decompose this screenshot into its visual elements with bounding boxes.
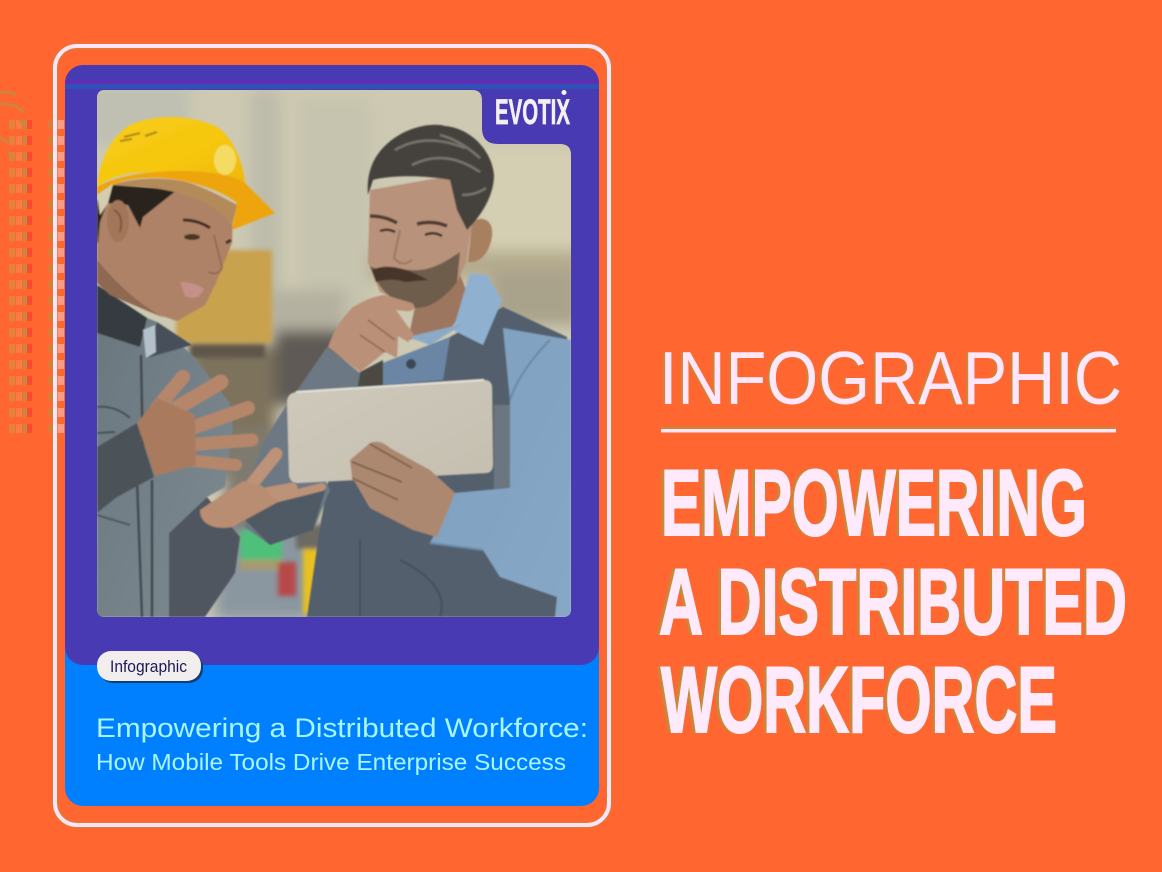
left man: helmet [97,117,245,187]
photo: two workers with a tablet [90,85,580,620]
panel: card [65,65,599,806]
right man: beard [370,252,460,308]
right man: neck [408,275,470,340]
right man: face [368,176,472,308]
divider line [661,427,1116,432]
left man: raised hand [157,377,252,465]
left man: lower sleeve [169,497,240,617]
right man: far arm [245,347,360,545]
right man: sleeve [430,328,571,617]
decorative dot pattern [0,92,70,433]
right man: shirt placket [383,337,450,385]
tag: Infographic pill [97,651,203,683]
tablet [287,380,493,483]
card heading: Empowering a Distributed Workforce: [96,713,588,743]
right man: vest and torso [307,307,571,617]
left man: cuff [97,423,154,513]
left man: open hand [240,454,322,505]
tag: Infographic pill: Infographic [110,657,187,676]
left man: hair [97,185,177,243]
left man: collar [97,285,147,347]
background: ochre block [176,250,272,343]
left man: eyebrows and eyes [183,220,231,243]
title [656,450,1127,752]
left man: helmet brim [97,171,275,230]
right man: chin hand [328,295,414,372]
card title area [65,620,599,806]
right man: pocket [494,405,512,490]
outer frame [55,46,609,825]
right man: eyebrows and eyes [370,216,447,226]
logo: EVOTIX: EVOTIX [495,93,570,132]
logo: EVOTIX [495,90,570,132]
left man: jacket [97,285,233,617]
left man: face [97,190,233,321]
right man: collar [453,273,502,345]
card subheading: How Mobile Tools Drive Enterprise Success [96,749,566,775]
card photo area [65,65,599,665]
right man: hair [368,125,494,230]
right man: hand on tablet [350,442,455,537]
left man: ear [107,200,129,242]
right man: ear [468,219,492,262]
